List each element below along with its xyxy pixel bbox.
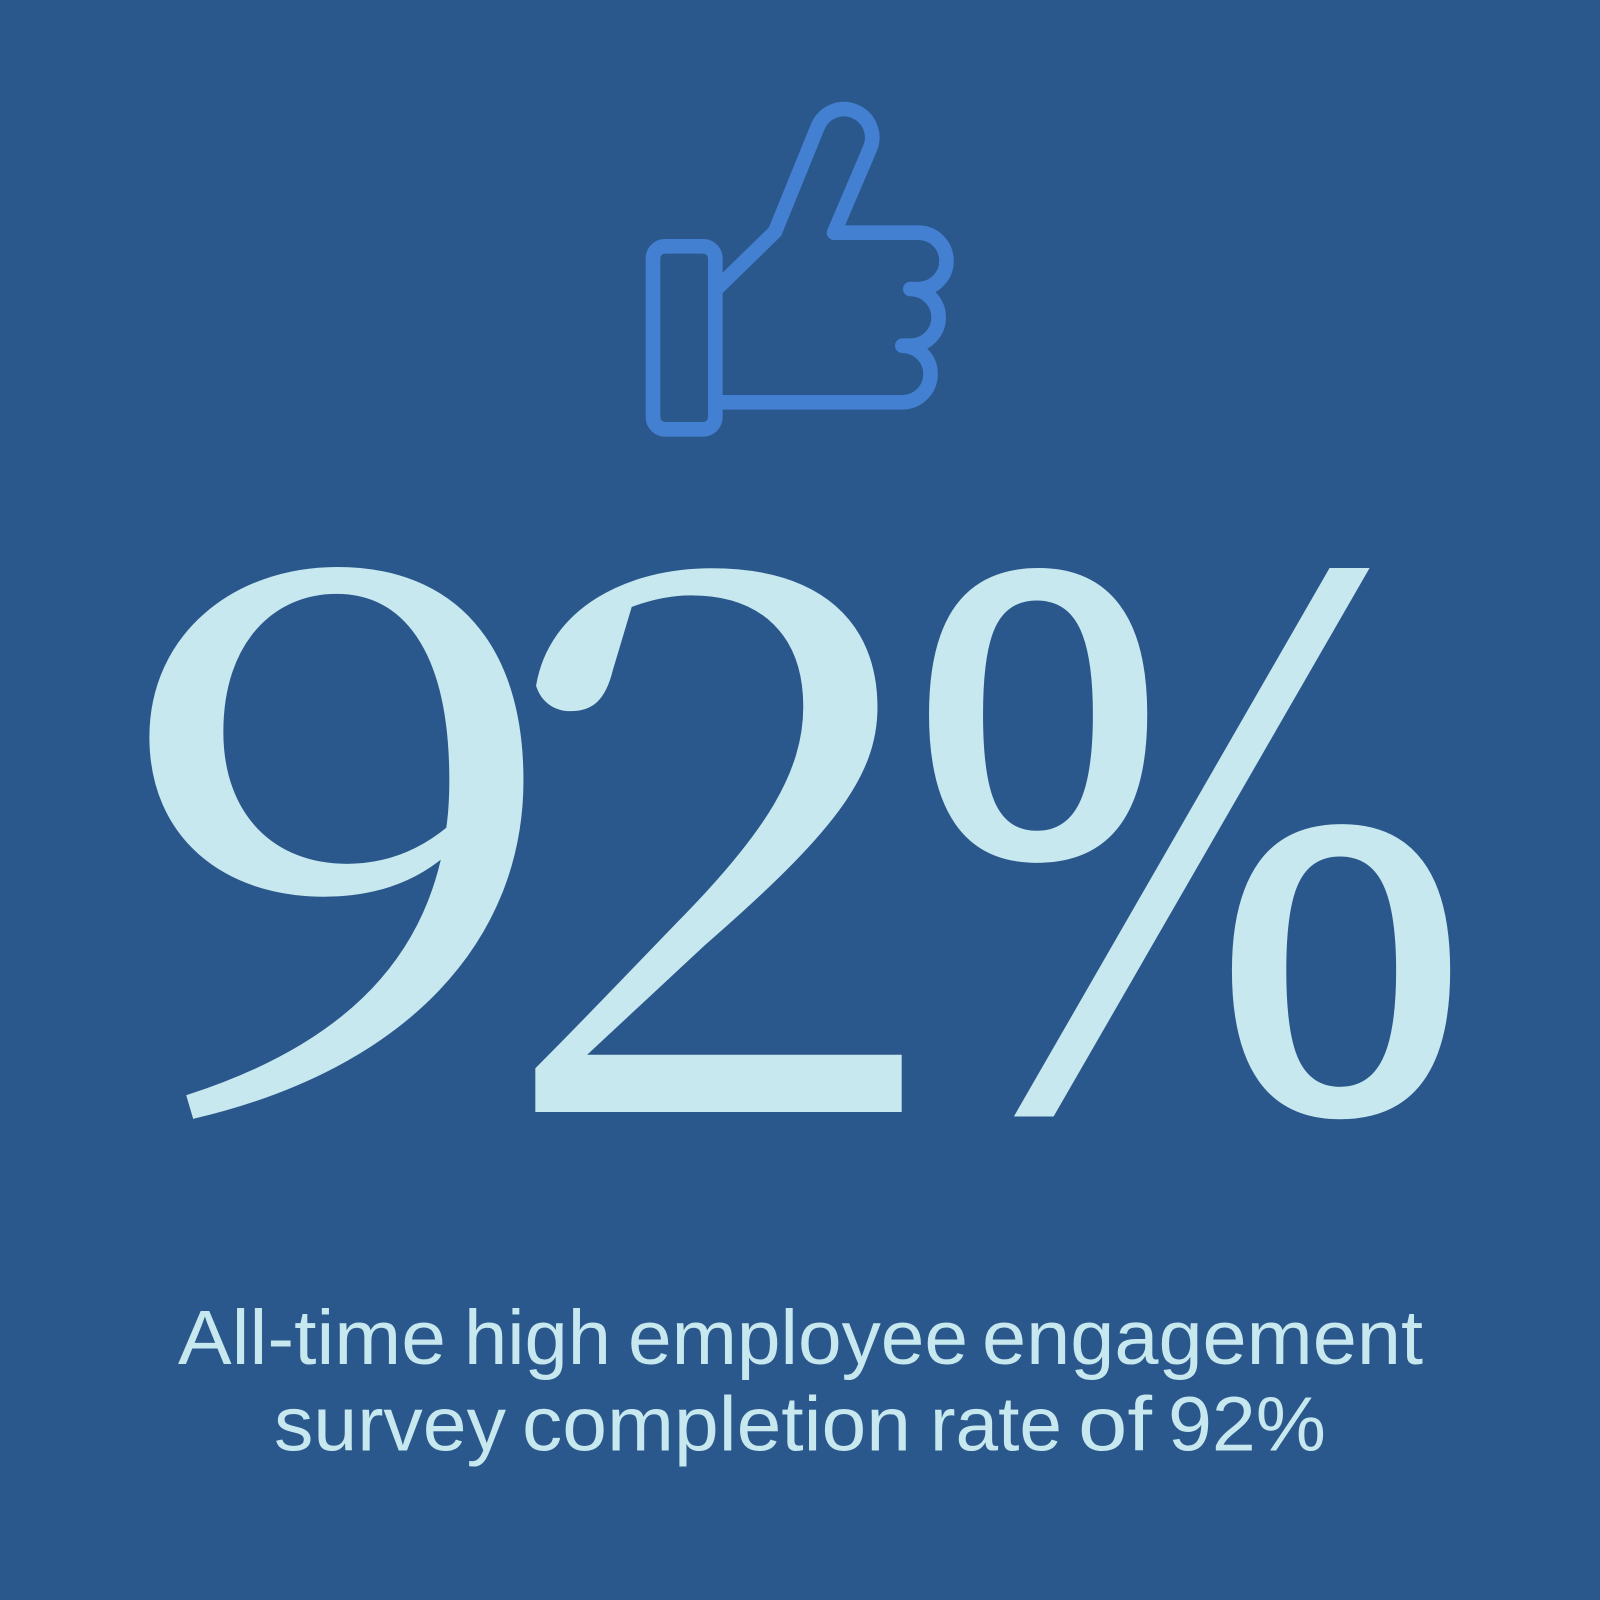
caption line 2: survey: [274, 1382, 507, 1468]
caption line 1: All-time: [178, 1295, 446, 1381]
caption line 2: 92%: [1168, 1382, 1326, 1468]
icon: thumbs up cuff: [653, 246, 715, 429]
digit 9: 9: [118, 246, 565, 1318]
percent sign: %: [907, 388, 1472, 1283]
icon: thumbs up: [653, 109, 947, 429]
big number 92%: [118, 245, 1472, 1326]
icon: thumbs up hand: [715, 109, 947, 402]
caption line 1: employee: [628, 1295, 968, 1381]
caption line 2: of: [1078, 1382, 1153, 1468]
caption: [178, 1295, 1423, 1468]
caption line 1: engagement: [982, 1295, 1423, 1381]
digit 2: 2: [494, 245, 938, 1326]
caption line 2: rate: [930, 1382, 1062, 1468]
caption line 1: high: [464, 1295, 611, 1381]
caption line 2: completion: [522, 1382, 911, 1468]
